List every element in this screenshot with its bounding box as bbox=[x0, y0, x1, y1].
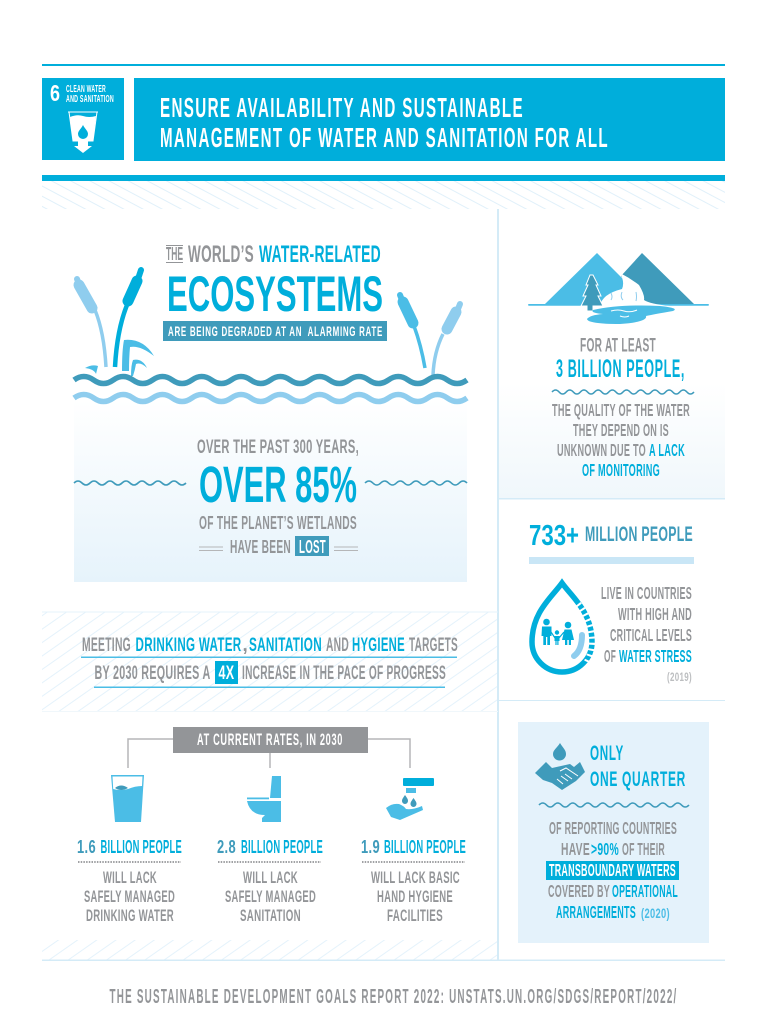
stat: drinking water: 1.6 bbox=[77, 837, 96, 857]
icon: water drop with family bbox=[532, 583, 592, 672]
wetlands statistic: OVER 85% bbox=[199, 456, 357, 513]
icon: faucet and hand bbox=[386, 778, 434, 820]
stat: 3 billion people: A LACK bbox=[649, 440, 685, 460]
water stress text: WITH HIGH AND bbox=[618, 604, 692, 624]
at current rates label: AT CURRENT RATES, IN 2030 bbox=[197, 731, 343, 749]
header title band bbox=[134, 78, 725, 161]
stat: 733+ million people: 733+ bbox=[529, 520, 579, 552]
panel: one quarter: HAVE bbox=[561, 839, 590, 859]
stat: hand hygiene: BILLION PEOPLE bbox=[384, 837, 466, 857]
targets text: BY 2030 REQUIRES A bbox=[94, 663, 210, 684]
targets text: HYGIENE bbox=[352, 635, 405, 656]
targets text: DRINKING WATER bbox=[136, 635, 242, 656]
waves bbox=[74, 376, 467, 402]
stat: drinking water: DRINKING WATER bbox=[86, 906, 174, 925]
hatched band: targets bbox=[42, 612, 498, 711]
targets text: MEETING bbox=[82, 635, 131, 656]
panel dividers bbox=[42, 209, 725, 961]
SDG 6 badge: 6 bbox=[50, 80, 60, 106]
SDG 6 badge: AND SANITATION bbox=[66, 93, 114, 105]
icon: reeds right bbox=[400, 295, 460, 375]
at current rates label bbox=[173, 727, 368, 753]
targets text: AND bbox=[326, 635, 349, 656]
water stress text: CRITICAL LEVELS bbox=[610, 625, 692, 645]
ecosystems heading: THE bbox=[166, 244, 183, 264]
SDG 6 badge bbox=[42, 78, 124, 160]
icon: handshake with drop bbox=[535, 743, 585, 790]
stat: drinking water: SAFELY MANAGED bbox=[84, 887, 175, 906]
wetlands statistic: HAVE BEEN bbox=[230, 537, 291, 557]
stat: hand hygiene: 1.9 bbox=[361, 837, 380, 857]
stat: 3 billion people: UNKNOWN DUE TO bbox=[557, 440, 646, 460]
targets text bbox=[81, 635, 458, 688]
icon: water glass bbox=[111, 775, 144, 822]
SDG 6 badge: CLEAN WATER bbox=[66, 83, 106, 95]
stat: sanitation: WILL LACK bbox=[243, 868, 298, 887]
connector lines bbox=[128, 739, 410, 768]
ecosystems heading: WATER-RELATED bbox=[259, 241, 381, 268]
wetlands statistic bbox=[74, 437, 467, 557]
stat: sanitation: 2.8 bbox=[217, 837, 236, 857]
stat: 733+ million people bbox=[529, 520, 694, 564]
stat: sanitation: BILLION PEOPLE bbox=[241, 837, 323, 857]
stat: hand hygiene: WILL LACK BASIC bbox=[371, 868, 460, 887]
stat: 3 billion people: THEY DEPEND ON IS bbox=[573, 420, 669, 440]
stat: drinking water bbox=[77, 837, 182, 925]
ecosystems heading: ARE BEING DEGRADED AT AN ALARMING RATE bbox=[168, 323, 383, 339]
stat: sanitation bbox=[217, 837, 323, 925]
ecosystems heading: WORLD’S bbox=[188, 241, 254, 268]
targets text: TARGETS bbox=[409, 635, 458, 656]
icon: mountains, lake and tree bbox=[528, 253, 709, 324]
wetlands statistic: LOST bbox=[299, 537, 326, 557]
wetlands statistic: OVER THE PAST 300 YEARS, bbox=[197, 437, 359, 458]
water stress text: (2019) bbox=[667, 670, 692, 684]
top rule bbox=[42, 64, 725, 66]
stat: drinking water: WILL LACK bbox=[103, 868, 157, 887]
water stress text: OF bbox=[604, 646, 616, 666]
targets text: INCREASE IN THE PACE OF PROGRESS bbox=[242, 663, 446, 684]
stat: 3 billion people bbox=[552, 336, 694, 480]
header lower bar bbox=[42, 175, 725, 181]
panel: one quarter: OPERATIONAL bbox=[612, 881, 678, 901]
stat: hand hygiene bbox=[361, 837, 466, 925]
panel: one quarter: (2020) bbox=[641, 905, 670, 921]
panel: one quarter bbox=[518, 722, 709, 943]
targets text: SANITATION bbox=[249, 635, 322, 656]
water stress text: WATER STRESS bbox=[619, 646, 692, 666]
panel: one quarter: ONE QUARTER bbox=[590, 768, 686, 791]
stat: 3 billion people: FOR AT LEAST bbox=[580, 336, 656, 356]
stat: drinking water: BILLION PEOPLE bbox=[100, 837, 182, 857]
stat: hand hygiene: HAND HYGIENE bbox=[377, 887, 453, 906]
ecosystems heading: ECOSYSTEMS bbox=[167, 266, 383, 322]
panel: one quarter: COVERED BY bbox=[548, 881, 610, 901]
ecosystems heading bbox=[163, 241, 387, 341]
panel background: right top bbox=[499, 209, 725, 499]
water stress text bbox=[601, 583, 692, 684]
hatched band below header bbox=[42, 181, 725, 209]
targets text: , bbox=[242, 635, 248, 656]
panel background: wetlands gradient bbox=[74, 400, 467, 582]
panel: one quarter: OF THEIR bbox=[622, 839, 665, 859]
wetlands statistic: OF THE PLANET’S WETLANDS bbox=[199, 513, 357, 533]
icon: reeds left bbox=[77, 270, 154, 376]
hatched band: bottom bbox=[42, 940, 498, 960]
icon: toilet bbox=[247, 776, 281, 822]
stat: sanitation: SAFELY MANAGED bbox=[225, 887, 316, 906]
targets text: 4X bbox=[218, 663, 234, 684]
stat: 3 billion people: OF MONITORING bbox=[582, 460, 660, 480]
stat: hand hygiene: FACILITIES bbox=[387, 906, 443, 925]
stat: 733+ million people: MILLION PEOPLE bbox=[585, 523, 693, 546]
panel: one quarter: ARRANGEMENTS bbox=[556, 902, 636, 922]
panel: one quarter: ONLY bbox=[590, 742, 624, 765]
stat: sanitation: SANITATION bbox=[240, 906, 301, 925]
panel: one quarter: >90% bbox=[591, 839, 619, 859]
